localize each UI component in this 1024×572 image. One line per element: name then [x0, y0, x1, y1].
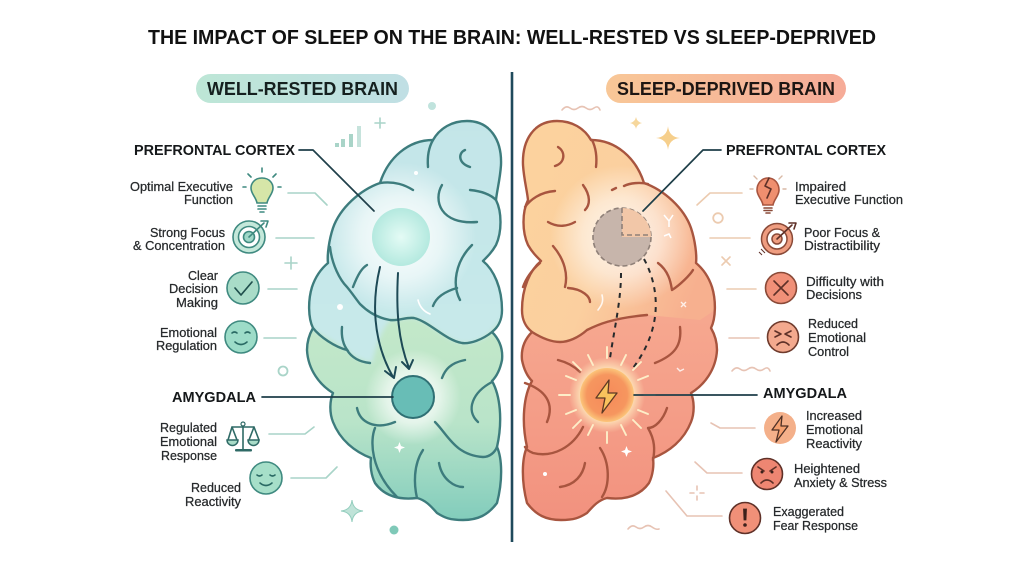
label: prefrontal cortex [643, 142, 886, 211]
item: regulated emotional response: Emotional [160, 434, 217, 449]
label: amygdala: AMYGDALA [172, 389, 256, 406]
item: difficulty with decisions: Decisions [806, 287, 862, 302]
item: difficulty with decisions [727, 272, 884, 304]
item: increased emotional reactivity: Increased [806, 408, 862, 423]
panel: well-rested brain [130, 74, 520, 534]
item: impaired executive function [697, 176, 903, 213]
item: impaired executive function: Executive Function [795, 192, 903, 207]
icon: target [759, 223, 796, 255]
item: exaggerated fear response: Fear Response [773, 518, 858, 533]
item: clear decision making: Clear [188, 268, 219, 283]
icon: check mark [227, 272, 259, 304]
item: reduced reactivity [185, 462, 337, 509]
icon: target [233, 221, 268, 253]
item: reduced emotional control: Emotional [808, 330, 866, 345]
icon: distressed face [768, 322, 798, 352]
item: heightened anxiety and stress: Heightened [794, 461, 860, 476]
icon: lightning bolt [596, 380, 617, 413]
decorative marks: well-rested side [278, 102, 436, 534]
item: clear decision making [169, 268, 297, 310]
impaired prefrontal cortex node [593, 208, 651, 266]
item: heightened anxiety and stress [695, 458, 887, 490]
item: poor focus and distractibility [710, 223, 881, 255]
item: optimal executive function [130, 168, 327, 212]
item: emotional regulation: Regulation [156, 338, 217, 353]
label: amygdala: AMYGDALA [763, 385, 847, 402]
item: strong focus and concentration [133, 221, 314, 253]
item: reduced emotional control: Reduced [808, 316, 858, 331]
icon: exclamation mark [730, 502, 760, 534]
heading: well-rested brain [196, 74, 409, 103]
item: reduced reactivity: Reactivity [185, 494, 242, 509]
icon: lightning bolt [764, 412, 796, 444]
item: clear decision making: Making [176, 295, 218, 310]
title: THE IMPACT OF SLEEP ON THE BRAIN: WELL-RESTED VS SLEEP-DEPRIVED [148, 27, 876, 49]
panel: sleep-deprived brain [500, 74, 903, 534]
item: exaggerated fear response: Exaggerated [773, 504, 844, 519]
item: difficulty with decisions: Difficulty with [806, 274, 884, 289]
item: increased emotional reactivity: Emotional [806, 422, 863, 437]
item: regulated emotional response [160, 420, 314, 463]
item: regulated emotional response: Response [161, 448, 217, 463]
item: reduced reactivity: Reduced [191, 480, 241, 495]
arrow: prefrontal cortex to amygdala 2 [397, 273, 413, 369]
icon: light bulb [243, 168, 281, 212]
item: regulated emotional response: Regulated [160, 420, 217, 435]
item: optimal executive function: Function [184, 192, 233, 207]
center divider [511, 72, 513, 542]
prefrontal cortex glow node [372, 208, 430, 266]
item: impaired executive function: Impaired [795, 179, 846, 194]
label: prefrontal cortex: PREFRONTAL CORTEX [726, 142, 886, 159]
item: reduced emotional control: Control [808, 344, 849, 359]
decorative marks: sleep-deprived side [562, 106, 770, 529]
brain illustration: well-rested [306, 120, 504, 522]
dashed pathway: prefrontal cortex to amygdala [610, 259, 656, 368]
icon: smiling face [225, 321, 257, 353]
icon: angry face [752, 458, 782, 490]
item: poor focus and distractibility: Distractibility [804, 238, 881, 253]
overactive amygdala node [559, 347, 655, 443]
item: reduced emotional control [729, 316, 866, 359]
amygdala node [392, 376, 434, 418]
item: clear decision making: Decision [169, 281, 218, 296]
label: prefrontal cortex: PREFRONTAL CORTEX [134, 142, 295, 159]
item: emotional regulation: Emotional [160, 325, 217, 340]
icon: cracked bulb [750, 176, 786, 213]
item: increased emotional reactivity: Reactivity [806, 436, 863, 451]
item: optimal executive function: Optimal Executive [130, 179, 233, 194]
item: strong focus and concentration: Strong Focus [150, 225, 225, 240]
item: strong focus and concentration: & Concentration [133, 238, 225, 253]
item: heightened anxiety and stress: Anxiety & Stress [794, 475, 887, 490]
arrow: prefrontal cortex to amygdala 1 [375, 267, 396, 378]
brain illustration: sleep-deprived [520, 120, 718, 522]
heading: sleep-deprived brain: SLEEP-DEPRIVED BRAIN [617, 78, 835, 99]
item: exaggerated fear response [666, 491, 858, 534]
icon: x mark [766, 272, 796, 304]
item: poor focus and distractibility: Poor Focus & [804, 225, 880, 240]
heading: well-rested brain: WELL-RESTED BRAIN [207, 78, 398, 99]
icon: calm face [250, 462, 282, 494]
item: emotional regulation [156, 321, 296, 353]
label: prefrontal cortex [134, 142, 374, 211]
infographic canvas [130, 30, 902, 542]
icon: balance scales [227, 422, 259, 452]
item: increased emotional reactivity [711, 408, 863, 451]
heading: sleep-deprived brain [606, 74, 846, 103]
